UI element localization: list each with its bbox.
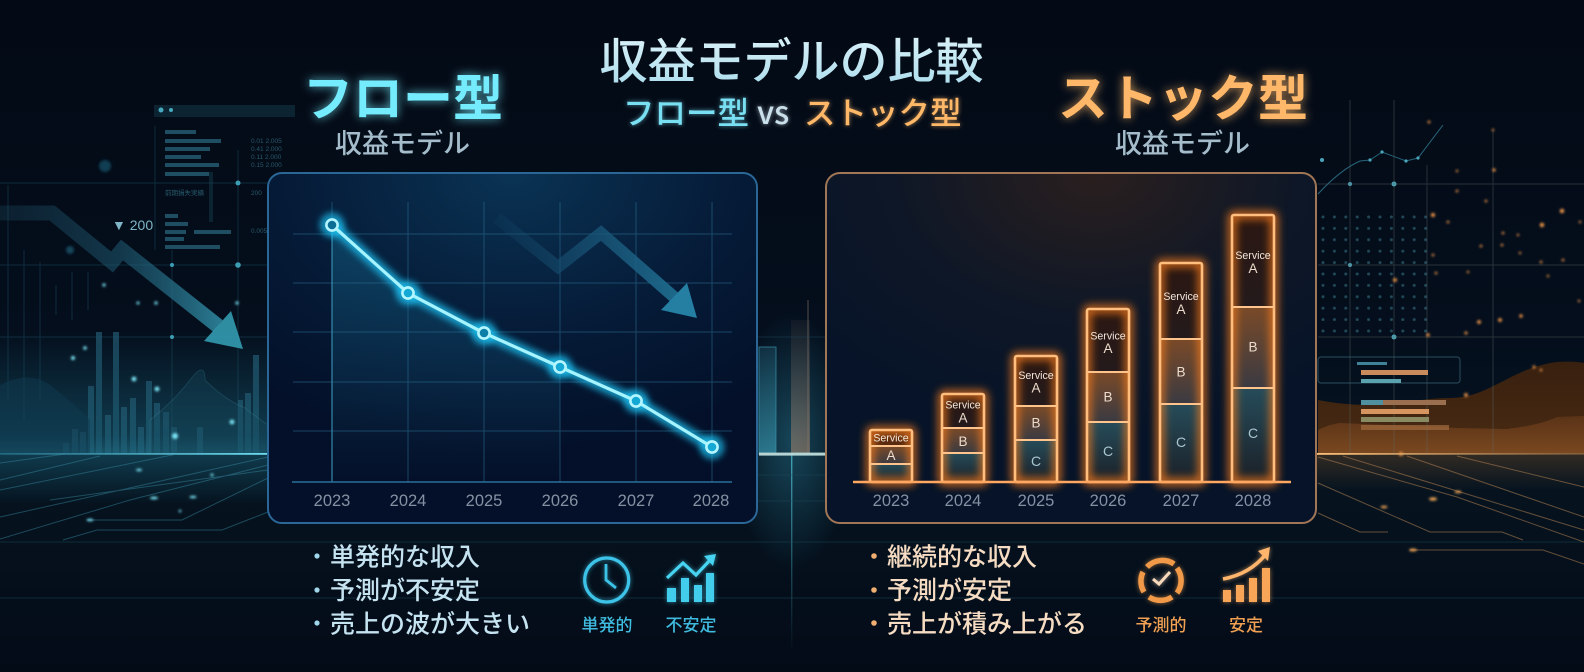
bar fills [870,215,1274,482]
bar 2025: C [1031,453,1041,469]
text block: flow bullets: 予測が不安定 [330,571,480,607]
bar 2027 [1160,263,1202,482]
text block: stock bullets: 予測が安定 [887,571,1012,607]
icon: ghost downward arrow [0,213,243,349]
year axis labels: 2025 [1018,492,1054,510]
heading: flow type: 収益モデル [335,122,470,161]
bar 2026: Service [1090,330,1126,342]
label: stable: 安定 [1229,611,1263,636]
bar 2023: A [886,448,896,463]
decorative left data backdrop: 0.15 2.000 [251,162,282,169]
year axis labels: 2027 [1163,492,1199,510]
year axis labels: 2027 [618,492,654,510]
icon: stable growth chart [1223,547,1270,602]
text block: stock bullets: 売上が積み上がる [887,604,1087,640]
decorative centre light [0,300,1584,654]
label: unstable: 不安定 [666,611,716,636]
area under line [332,225,560,482]
main title: 収益モデルの比較 [599,22,984,92]
icon: faint decline arrow [497,218,697,318]
decorative left data backdrop: 0.41 2.000 [251,146,282,153]
bar 2027: C [1176,434,1186,450]
bar 2027: Service [1163,291,1199,303]
bar 2026 [1087,309,1129,482]
panel: stock stacked bars [826,173,1316,523]
year axis labels [873,492,1271,510]
heading: stock type: ストック型 [1058,59,1308,131]
subtitle: flow vs stock: フロー型 [623,88,749,134]
decorative left data backdrop: 前期損失実績 [165,187,204,197]
bar glow [870,215,1274,482]
bar 2024: B [958,434,968,449]
bar 2024 [942,394,984,482]
year axis labels: 2023 [314,492,350,510]
icon: unstable chart [667,554,716,602]
year axis labels: 2026 [542,492,578,510]
bar 2025: B [1031,416,1041,430]
decorative left data backdrop: 0.005 [251,228,268,235]
subtitle: flow vs stock [623,88,962,134]
decorative left data backdrop: 0.01 2.005 [251,138,282,145]
decorative left data backdrop: 200 [251,190,262,197]
bar 2028 [1232,215,1274,482]
text block: stock bullets [871,538,1087,640]
year axis labels: 2025 [466,492,502,510]
bar 2025 [1015,356,1057,482]
label: down 200: ▼ 200 [112,217,153,233]
label: one-off: 単発的 [582,611,632,636]
title [599,22,984,134]
decorative right data backdrop [1318,100,1584,456]
bar 2026: B [1103,390,1113,404]
bar 2028: B [1248,340,1258,354]
decorative left data backdrop [0,105,295,454]
bar 2023 [870,430,912,482]
bar 2028: Service [1235,250,1271,262]
year axis labels: 2028 [693,492,729,510]
bar 2024: A [958,410,968,426]
text block: flow bullets [314,538,530,640]
year axis labels: 2023 [873,492,909,510]
text block: flow bullets: 売上の波が大きい [330,604,530,640]
heading: flow type: フロー型 [303,59,503,131]
bar 2024: Service [945,400,981,412]
left backdrop bars [63,332,259,454]
bar 2027: B [1176,364,1186,380]
year axis labels: 2024 [945,492,981,510]
bar 2026: A [1103,341,1113,356]
bar 2025: Service [1018,370,1054,382]
icon: clock [585,558,629,602]
text block: flow bullets: 単発的な収入 [330,538,480,574]
decorative floor circuit lines [0,453,1584,564]
line series [324,217,720,455]
bar 2025: A [1031,380,1041,396]
label: predictive: 予測的 [1136,611,1186,636]
bar 2027: A [1176,302,1186,317]
subtitle: flow vs stock: vs [757,88,789,134]
year axis labels [314,492,729,510]
bar 2028: C [1248,425,1258,441]
panel: flow line chart [268,173,757,523]
year axis labels: 2026 [1090,492,1126,510]
heading: stock type: 収益モデル [1115,122,1250,161]
year axis labels: 2024 [390,492,426,510]
decorative left data backdrop: 0.11 2.000 [251,154,282,161]
text block: stock bullets: 継続的な収入 [887,538,1037,574]
bar 2023: Service [873,432,909,444]
year axis labels: 2028 [1235,492,1271,510]
subtitle: flow vs stock: ストック型 [804,88,962,134]
bar 2026: C [1103,443,1113,459]
bar 2028: A [1248,261,1258,276]
icon: predictive ring [1141,560,1181,600]
